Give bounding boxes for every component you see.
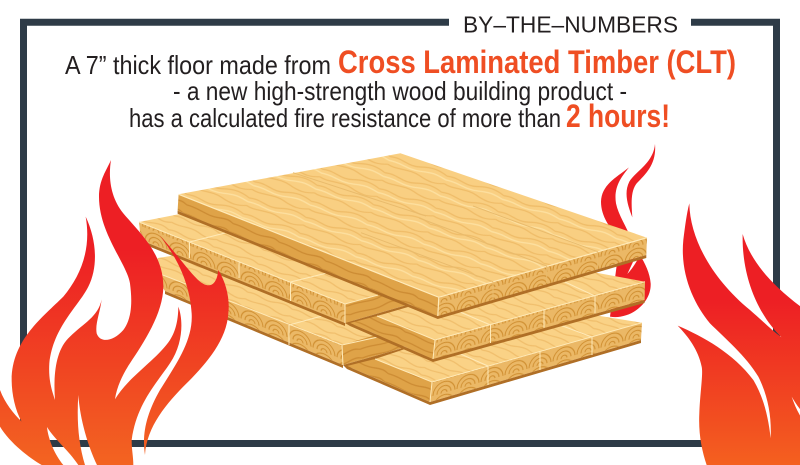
top layer boards [178,153,647,319]
highlighted duration: 2 hours! [566,98,670,134]
headline line 2: - a new high-strength wood building product - [173,76,627,106]
icon: left flames [0,160,229,465]
highlighted product name: Cross Laminated Timber (CLT) [338,44,736,80]
headline line 1: A 7” thick floor made from [65,50,331,80]
headline line 3: has a calculated fire resistance of more than [129,103,561,133]
illustration: stack of timber boards [139,153,647,405]
middle layer boards [139,210,645,362]
main left flame [0,160,181,465]
icon: right flames [678,203,800,465]
bottom layer boards [150,245,642,405]
icon: small flame behind lumber [601,144,655,317]
heading: by-the-numbers: BY–THE–NUMBERS [463,12,678,38]
right tongue of left flame [144,235,229,455]
headline text block [65,44,736,134]
